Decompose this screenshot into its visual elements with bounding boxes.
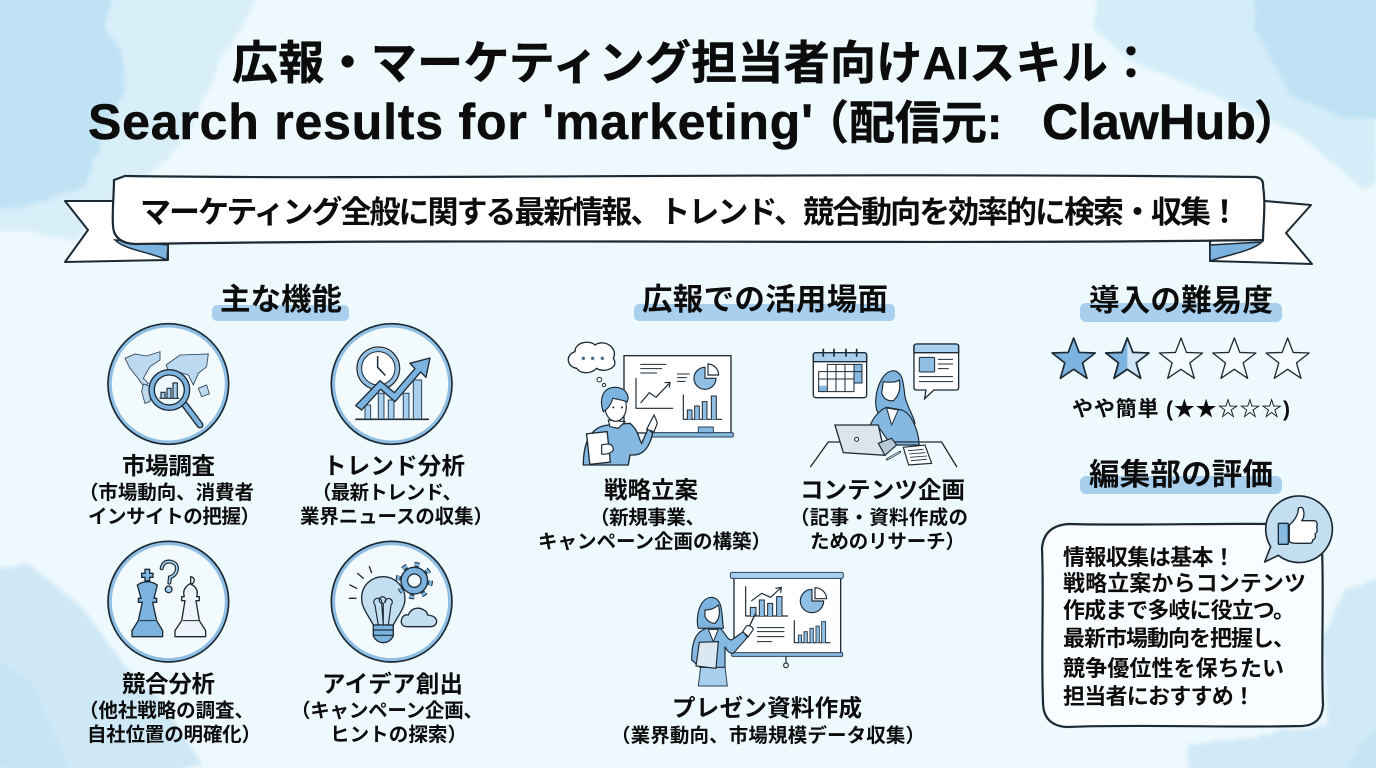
review text: 作成まで多岐に役立つ。 bbox=[1063, 598, 1295, 623]
review text bbox=[1063, 545, 1306, 709]
heading: 編集部の評価: 編集部の評価 bbox=[1089, 458, 1273, 492]
icon: thumbs up bubble bbox=[1265, 496, 1332, 563]
description: 業界ニュースの収集） bbox=[300, 506, 493, 528]
title: 広報・マーケティング担当者向けAIスキル： bbox=[232, 37, 1154, 89]
heading: 主な機能: 主な機能 bbox=[220, 283, 342, 317]
label: 競合分析 bbox=[122, 671, 215, 697]
icon: light bulb, gear and cloud bbox=[331, 541, 452, 662]
label: アイデア創出 bbox=[322, 670, 463, 697]
description: （市場動向、消費者 bbox=[79, 482, 254, 504]
star 5 empty bbox=[1266, 338, 1309, 378]
description: （最新トレンド、 bbox=[312, 482, 462, 504]
description: （記事・資料作成の bbox=[790, 506, 968, 529]
description: （他社戦略の調査、 bbox=[79, 699, 254, 722]
description: インサイトの把握） bbox=[88, 506, 260, 528]
illustration: woman with laptop, calendar and article bbox=[811, 344, 959, 467]
star rating bbox=[1052, 338, 1309, 378]
review text: 戦略立案からコンテンツ bbox=[1063, 571, 1306, 596]
description bbox=[79, 482, 260, 528]
label: プレゼン資料作成 bbox=[672, 694, 862, 721]
heading: 導入の難易度: 導入の難易度 bbox=[1089, 284, 1273, 318]
feature: アイデア創出 bbox=[291, 541, 483, 746]
banner ribbon bbox=[65, 175, 1312, 264]
editor review callout bbox=[1042, 496, 1332, 727]
description bbox=[790, 506, 968, 553]
review text: 最新市場動向を把握し、 bbox=[1063, 626, 1295, 651]
star 1 filled bbox=[1052, 338, 1095, 378]
illustration: man at whiteboard bbox=[568, 342, 733, 465]
title bbox=[88, 37, 1300, 150]
icon: world map and magnifier bbox=[108, 324, 229, 444]
label: トレンド分析 bbox=[323, 453, 465, 479]
description: （キャンペーン企画、 bbox=[291, 700, 483, 722]
rating label: やや簡単 (★★☆☆☆) bbox=[1072, 398, 1290, 421]
review text: 競争優位性を保ちたい bbox=[1063, 656, 1284, 681]
icon: clock and growth arrow bbox=[331, 324, 452, 444]
use case: プレゼン資料作成 bbox=[611, 572, 925, 747]
feature: トレンド分析 bbox=[300, 324, 493, 528]
title: （配信元: bbox=[803, 97, 1002, 149]
feature: 市場調査 bbox=[79, 324, 260, 528]
label: 市場調査 bbox=[122, 453, 215, 479]
title: ClawHub bbox=[1042, 94, 1256, 150]
description: 自社位置の明確化） bbox=[87, 724, 261, 746]
description bbox=[300, 482, 493, 528]
description: ヒントの探索） bbox=[330, 724, 467, 746]
use case: コンテンツ企画 bbox=[790, 344, 968, 553]
description bbox=[538, 507, 771, 553]
label: コンテンツ企画 bbox=[800, 477, 965, 503]
icon: chess pieces bbox=[108, 541, 229, 662]
title: Search results for 'marketing' bbox=[88, 94, 814, 150]
review text: 担当者におすすめ！ bbox=[1063, 684, 1255, 709]
star 2 half filled bbox=[1106, 338, 1149, 378]
description: ためのリサーチ） bbox=[810, 531, 965, 553]
title: ） bbox=[1254, 97, 1300, 149]
banner text: マーケティング全般に関する最新情報、トレンド、競合動向を効率的に検索・収集！ bbox=[140, 195, 1240, 230]
use case: 戦略立案 bbox=[538, 342, 771, 553]
description: （業界動向、市場規模データ収集） bbox=[611, 724, 925, 747]
label: 戦略立案 bbox=[604, 477, 698, 503]
description bbox=[291, 700, 483, 746]
illustration: woman presenting at projector screen bbox=[692, 572, 843, 686]
star 4 empty bbox=[1213, 338, 1256, 378]
description: （新規事業、 bbox=[590, 507, 705, 529]
feature: 競合分析 bbox=[79, 541, 261, 746]
review text: 情報収集は基本！ bbox=[1063, 545, 1235, 570]
description bbox=[79, 699, 261, 746]
description: キャンペーン企画の構築） bbox=[538, 530, 771, 553]
heading: 広報での活用場面: 広報での活用場面 bbox=[642, 283, 888, 317]
star 3 empty bbox=[1159, 338, 1203, 378]
